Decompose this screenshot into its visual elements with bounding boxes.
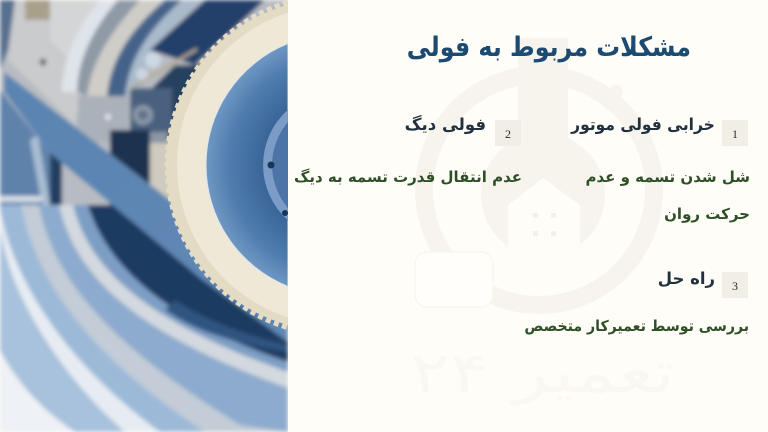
description 1: حرکت روان [664,205,750,223]
heading 1: خرابی فولی موتور [571,115,715,134]
number badge 3 [722,272,748,298]
pulley [166,3,288,327]
number badge 3: 3 [732,279,738,293]
description 3: بررسی توسط تعمیرکار متخصص [524,317,749,335]
item 2: drum pulley [294,114,522,186]
heading 3: راه حل [658,269,715,288]
number badge 2: 2 [505,127,511,141]
item 3: solution [524,269,749,335]
item 1: motor pulley failure [570,115,750,223]
hardware details [40,49,197,89]
description 1: شل شدن تسمه و عدم [585,168,750,186]
lower drum rings [0,190,288,432]
upper machine housing [0,0,288,205]
background watermark logo: تعمیر ۲۴ [410,341,675,406]
background watermark logo [410,38,675,406]
belt [4,72,288,342]
heading 2: فولی دیگ [405,115,486,134]
number badge 1 [722,120,748,146]
description 2: عدم انتقال قدرت تسمه به دیگ [294,168,522,186]
description 1 [585,168,750,223]
photo: washing machine pulley and belt [0,0,288,432]
number badge 2 [495,120,521,146]
number badge 1: 1 [732,127,738,141]
title: مشکلات مربوط به فولی [407,32,691,63]
